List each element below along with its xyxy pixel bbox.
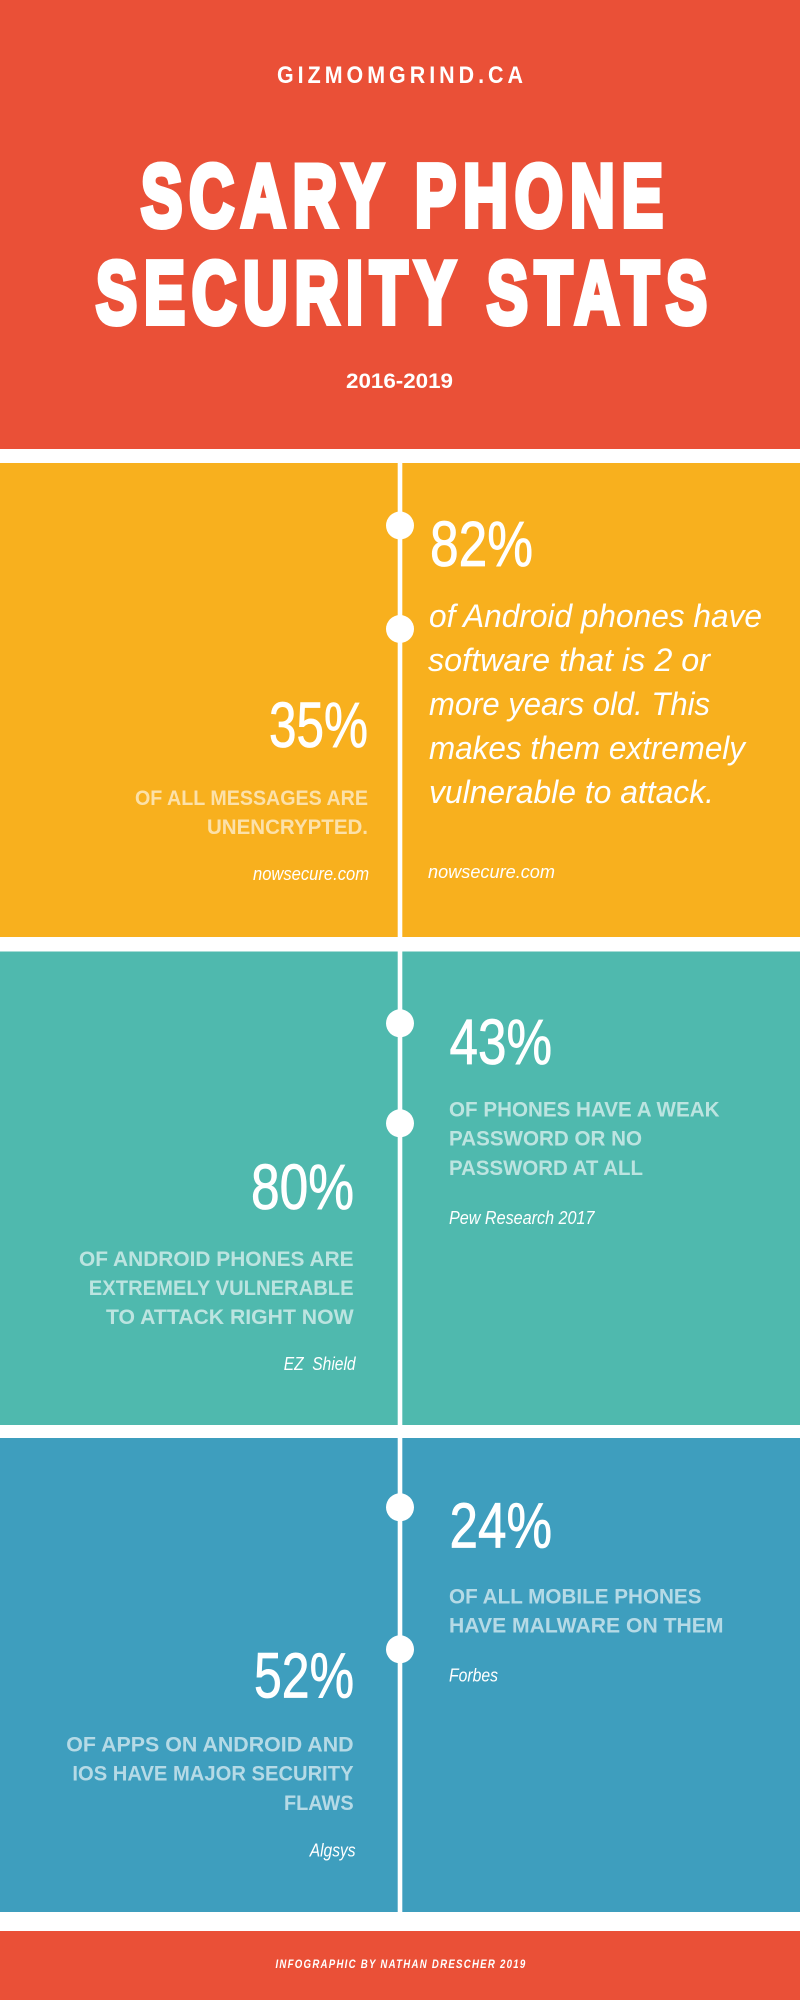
text: 24% description: [449, 1585, 724, 1638]
text: 82% description: vulnerable to attack.: [429, 774, 714, 810]
stat: 43%: 43%: [450, 1006, 552, 1078]
panel: blue stats: [0, 1438, 800, 1912]
text: 80% description: OF ANDROID PHONES ARE: [79, 1248, 354, 1271]
text: 35% description: UNENCRYPTED.: [207, 816, 368, 839]
source: Forbes: Forbes: [449, 1666, 498, 1686]
stat: 82%: 82%: [430, 508, 533, 580]
text: 80% description: TO ATTACK RIGHT NOW: [106, 1306, 354, 1329]
text: 24% description: HAVE MALWARE ON THEM: [449, 1615, 724, 1638]
text: 43% description: PASSWORD AT ALL: [449, 1157, 643, 1180]
stat: 80%: 80%: [251, 1151, 354, 1223]
timeline: [386, 1438, 414, 1912]
timeline: [386, 463, 414, 937]
text: 82% description: of Android phones have: [429, 598, 762, 634]
date range: 2016-2019: [346, 370, 453, 393]
text: 82% description: software that is 2 or: [428, 642, 711, 678]
stat: 35%: 35%: [269, 689, 368, 761]
panel: yellow stats: [0, 463, 800, 937]
panel: teal stats: [0, 952, 800, 1425]
text: 35% description: OF ALL MESSAGES ARE: [135, 787, 368, 810]
stat: 24%: 24%: [450, 1490, 552, 1562]
text: 35% description: [135, 787, 368, 839]
text: 80% description: [79, 1248, 354, 1329]
text: 43% description: PASSWORD OR NO: [449, 1128, 642, 1151]
stat: 52%: 52%: [254, 1640, 354, 1712]
text: 82% description: more years old. This: [429, 686, 710, 722]
title: [96, 146, 714, 342]
text: 43% description: OF PHONES HAVE A WEAK: [449, 1099, 720, 1122]
text: 52% description: FLAWS: [284, 1792, 354, 1815]
source: nowsecure left: nowsecure.com: [253, 864, 369, 884]
site name: GIZMOMGRIND.CA: [277, 62, 527, 89]
source: EZ Shield: EZ Shield: [284, 1354, 356, 1374]
source: Algsys: Algsys: [309, 1841, 356, 1861]
text: 52% description: OF APPS ON ANDROID AND: [66, 1734, 354, 1757]
source: nowsecure right: nowsecure.com: [428, 862, 555, 882]
text: 82% description: [428, 598, 762, 810]
credit: INFOGRAPHIC BY NATHAN DRESCHER 2019: [276, 1959, 526, 1971]
source: Pew Research: Pew Research 2017: [449, 1208, 595, 1228]
timeline: [386, 952, 414, 1425]
text: 52% description: [66, 1734, 354, 1815]
panel: footer: [0, 1931, 800, 2000]
text: 43% description: [449, 1099, 720, 1180]
text: 24% description: OF ALL MOBILE PHONES: [449, 1585, 702, 1608]
text: 80% description: EXTREMELY VULNERABLE: [89, 1277, 354, 1300]
text: 52% description: IOS HAVE MAJOR SECURITY: [72, 1763, 354, 1786]
text: 82% description: makes them extremely: [429, 730, 747, 766]
panel: header: [0, 0, 800, 449]
